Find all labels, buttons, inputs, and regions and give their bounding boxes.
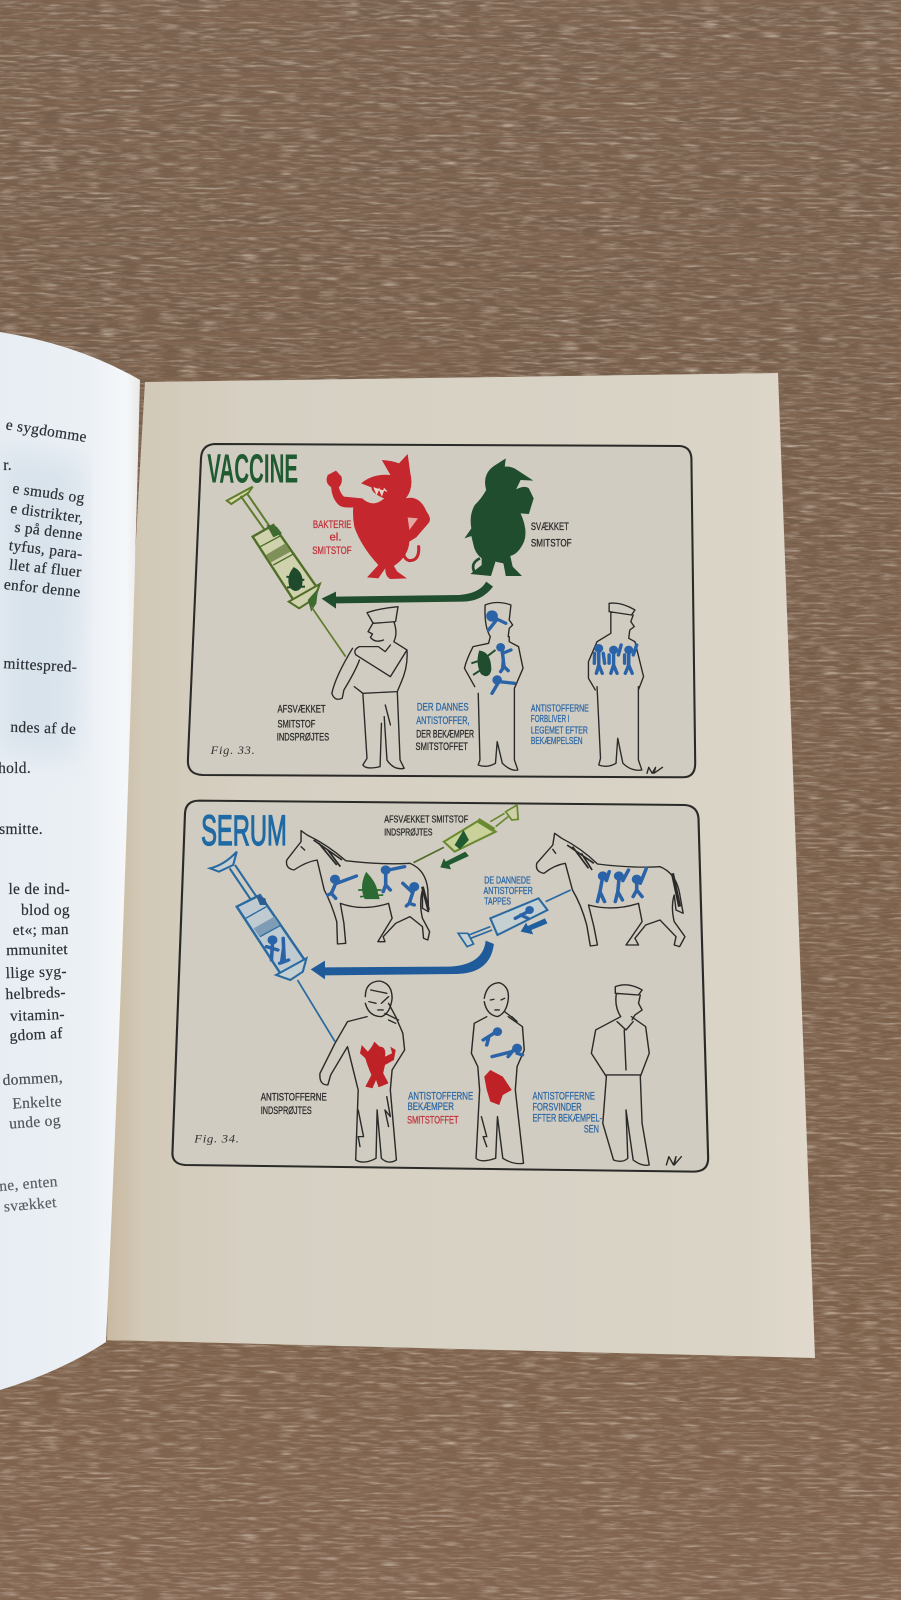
label: antistofferne forsvinder efter bekæmpelsen: ANTISTOFFERNE (532, 1091, 595, 1102)
left page text lines: et«; man (13, 921, 69, 939)
label: der dannes antistoffer, der bekæmper smitstoffet: ANTISTOFFER, (416, 715, 470, 727)
left page text lines: enfor denne (3, 576, 81, 601)
label: svækket smitstof: SMITSTOF (531, 538, 572, 550)
label: antistofferne bekæmper smitstoffet: BEKÆMPER (407, 1101, 454, 1113)
antibody figures and germ inside body (471, 612, 514, 693)
label: de dannede antistoffer tappes: TAPPES (484, 897, 511, 908)
arrow: small blue (521, 918, 547, 934)
right book page (107, 373, 815, 1358)
left page text lines: vitamin- (10, 1006, 65, 1025)
label: antistofferne bekæmper smitstoffet: SMITSTOFFET (407, 1115, 459, 1126)
left page text lines: s på denne (14, 519, 84, 544)
figure: horse with antibodies (536, 833, 685, 947)
heading: SERUM: SERUM (201, 807, 287, 855)
label: antistofferne indsprøjtes: ANTISTOFFERNE (261, 1092, 327, 1104)
label: antistofferne forsvinder efter bekæmpelsen: SEN (584, 1124, 599, 1136)
syringe: tapping antibodies, blue (458, 890, 571, 947)
panel frame (172, 801, 708, 1172)
label: antistofferne indsprøjtes (261, 1092, 327, 1117)
label: afsvækket smitstof indsprøjtes (serum): INDSPRØJTES (384, 828, 433, 838)
left page text lines: ne, enten (0, 1173, 58, 1195)
syringe with weakened germ (227, 487, 346, 657)
left page text lines: e smuds og (11, 480, 86, 507)
left page text lines: mittespred- (3, 655, 78, 676)
panel: serum (Fig. 34) (172, 801, 708, 1172)
left page text lines: tyfus, para- (8, 537, 84, 563)
label: antistofferne bekæmper smitstoffet: ANTISTOFFERNE (408, 1091, 473, 1102)
three antibody figures (594, 645, 637, 673)
left page text lines: ndes af de (10, 719, 76, 738)
blue syringe with antibodies (210, 852, 335, 1042)
syringe: afsvækket smitstof, green (414, 805, 518, 863)
antibodies and germ inside horse (328, 867, 417, 906)
left book page (0, 332, 140, 1390)
label: antistofferne forbliver i legemet efter bekæmpelsen: FORBLIVER I (531, 714, 570, 725)
label: afsvækket smitstof indsprøjtes (serum) (384, 815, 468, 838)
label: antistofferne forbliver i legemet efter bekæmpelsen (531, 704, 589, 747)
label: der dannes antistoffer, der bekæmper smitstoffet (416, 702, 474, 753)
left page text lines: Enkelte (12, 1093, 62, 1113)
antibodies and germ inside body (483, 1029, 522, 1105)
left page text lines (0, 416, 88, 1216)
arrow: large blue, from syringe to patient (311, 941, 494, 979)
label: antistofferne forsvinder efter bekæmpelsen (532, 1091, 602, 1136)
left page text lines: llige syg- (5, 963, 67, 982)
three antibodies inside horse (597, 868, 646, 902)
label: bakterie el. smitstof: el. (329, 532, 342, 544)
label: antistofferne forbliver i legemet efter bekæmpelsen: BEKÆMPELSEN (531, 736, 583, 747)
caption: Fig. 34: Fig. 34. (193, 1132, 239, 1146)
left page text lines: helbreds- (5, 984, 66, 1003)
label: de dannede antistoffer tappes: DE DANNEDE (484, 876, 531, 886)
label: svækket smitstof (531, 521, 572, 550)
icon: green weakened devil (464, 458, 534, 576)
left page text lines: llet af fluer (8, 556, 83, 581)
label: der dannes antistoffer, der bekæmper smitstoffet: DER DANNES (417, 702, 469, 714)
label: bakterie el. smitstof: BAKTERIE (313, 519, 351, 531)
label: bakterie el. smitstof: SMITSTOF (312, 545, 352, 557)
left page text lines: e sygdomme (5, 416, 88, 446)
panel: vaccine (Fig. 33): VACCINE (207, 446, 298, 492)
artist signature (647, 767, 662, 773)
label: antistofferne forsvinder efter bekæmpelsen: EFTER BEKÆMPEL- (532, 1113, 602, 1124)
left page text lines: r. (3, 457, 12, 474)
figure: sick man being injected (320, 981, 405, 1162)
label: der dannes antistoffer, der bekæmper smitstoffet: DER BEKÆMPER (416, 728, 474, 740)
icon: red germ in body (360, 1042, 396, 1088)
label: de dannede antistoffer tappes: ANTISTOFFER (484, 886, 533, 897)
left page text lines: dommen, (2, 1069, 63, 1089)
artist signature (666, 1157, 681, 1165)
figure: healed man (591, 985, 649, 1165)
left page text lines: le de ind- (8, 881, 70, 898)
arrow: small green (440, 852, 469, 869)
label: antistofferne forsvinder efter bekæmpelsen: FORSVINDER (532, 1102, 582, 1114)
figure: sick man recovering (471, 983, 524, 1164)
left page text lines: svækket (3, 1194, 58, 1216)
left page text lines: mmunitet (6, 941, 68, 959)
left page text lines: e distrikter, (9, 500, 85, 527)
left page text lines: smitte. (0, 821, 43, 838)
label: afsvækket smitstof indsprøjtes: INDSPRØJTES (277, 732, 329, 744)
label: afsvækket smitstof indsprøjtes: SMITSTOF (277, 718, 315, 730)
label: antistofferne forbliver i legemet efter bekæmpelsen: ANTISTOFFERNE (531, 704, 589, 715)
arrow: green, from weakened germ to syringe (322, 582, 493, 609)
label: afsvækket smitstof indsprøjtes (serum): AFSVÆKKET SMITSTOF (384, 815, 468, 826)
caption: Fig. 33: Fig. 33. (210, 743, 255, 757)
icon: red germ devil (327, 454, 430, 579)
label: svækket smitstof: SVÆKKET (531, 521, 569, 533)
label: afsvækket smitstof indsprøjtes (277, 704, 329, 744)
left page text lines: unde og (9, 1112, 61, 1133)
label: der dannes antistoffer, der bekæmper smitstoffet: SMITSTOFFET (416, 741, 468, 753)
panel: vaccine (Fig. 33) (188, 444, 695, 777)
figure: man forming antibodies (464, 602, 523, 770)
left page text lines: gdom af (9, 1025, 64, 1045)
figure: man being injected (332, 607, 407, 769)
label: antistofferne bekæmper smitstoffet (407, 1091, 473, 1126)
figure: man retaining antibodies (588, 603, 644, 770)
label: de dannede antistoffer tappes (484, 876, 533, 908)
label: antistofferne forbliver i legemet efter bekæmpelsen: LEGEMET EFTER (531, 725, 588, 736)
label: bakterie el. smitstof (312, 519, 352, 557)
left page text lines: blod og (21, 902, 70, 919)
panel frame (188, 444, 695, 777)
figure: horse with antibodies and germ (286, 831, 430, 944)
label: antistofferne indsprøjtes: INDSPRØJTES (261, 1105, 312, 1117)
label: afsvækket smitstof indsprøjtes: AFSVÆKKET (277, 704, 326, 716)
